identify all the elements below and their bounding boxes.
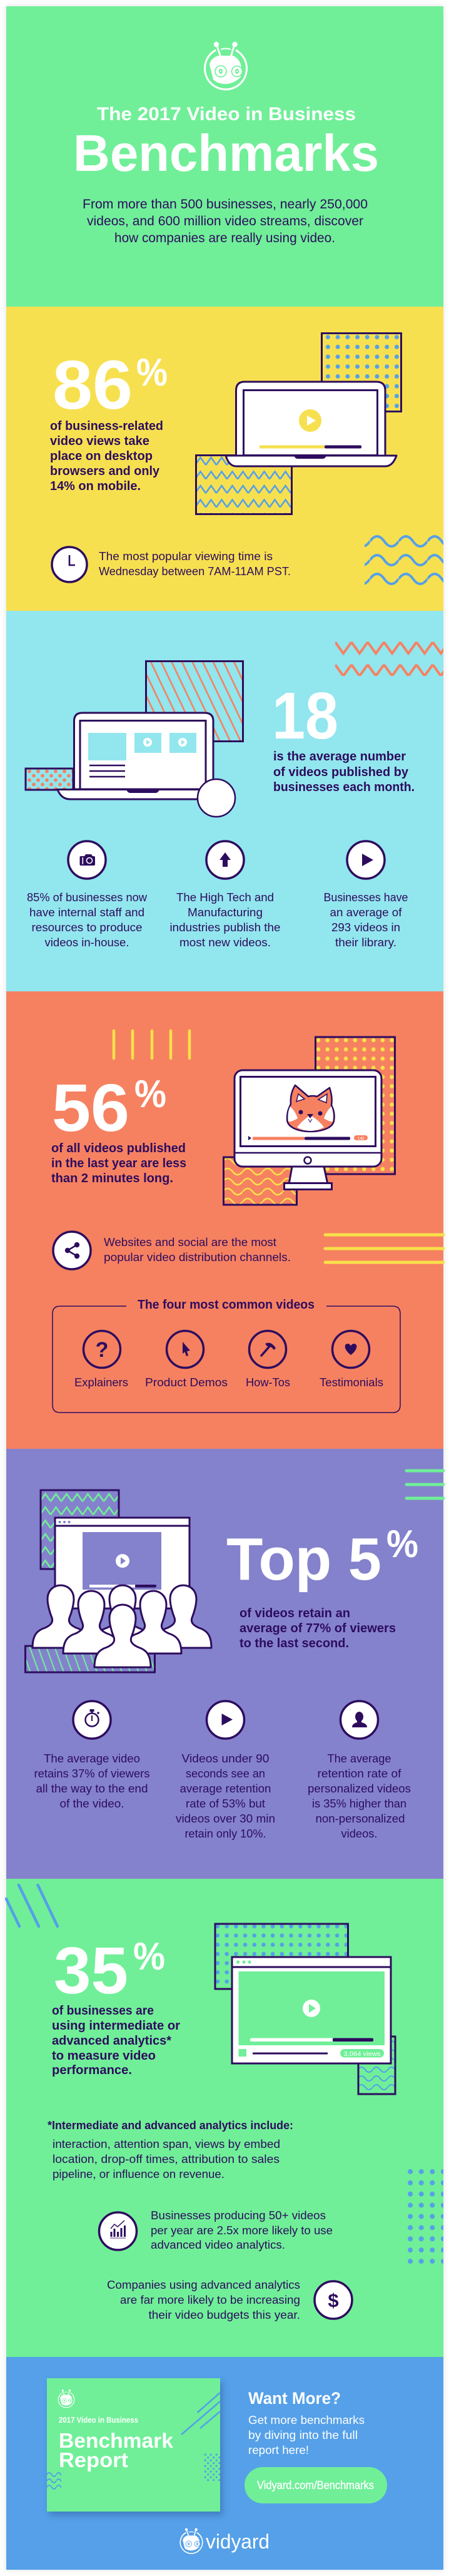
column: high tech (170, 841, 280, 949)
cta text: Get more benchmarks (248, 2414, 365, 2426)
column: high tech: The High Tech and (176, 891, 274, 904)
text: 50+ videos (151, 2209, 333, 2251)
report cover: Report (59, 2448, 128, 2471)
decoration: green lines (406, 1471, 443, 1498)
item: explainers: ? (96, 1338, 108, 1362)
distribution text: popular video distribution channels. (104, 1251, 291, 1264)
stat: 35 percent: 35 (54, 1934, 128, 2008)
column: high tech: most new videos. (179, 936, 271, 949)
stat: 35 percent (54, 1934, 165, 2008)
report cover (47, 2378, 220, 2512)
decoration: yellow lines (325, 1235, 443, 1262)
column: in-house: videos in-house. (45, 936, 129, 949)
button: Vidyard.com/Benchmarks (257, 2479, 374, 2492)
stat description: advanced analytics* (52, 2034, 171, 2048)
column: library size: 293 videos in (331, 921, 400, 934)
column: high tech: industries publish the (170, 921, 280, 934)
column: personalized videos: personalized videos (308, 1782, 411, 1795)
distribution text (104, 1236, 291, 1264)
intro text: From more than 500 businesses, nearly 250,000 (83, 197, 368, 212)
stat description (240, 1607, 396, 1650)
cta text: by diving into the full (248, 2429, 358, 2441)
stat description: than 2 minutes long. (51, 1172, 173, 1185)
column: video length retention: seconds see an (186, 1767, 265, 1780)
panel: videos published (6, 611, 443, 991)
stat description (50, 419, 163, 493)
icon: dollar: $ (328, 2289, 339, 2311)
item: how-tos (246, 1331, 290, 1389)
report cover: 2017 Video in Business (59, 2415, 138, 2425)
stat: 18: 18 (272, 679, 338, 753)
stat description: using intermediate or (52, 2019, 180, 2033)
decoration: yellow bars (114, 1031, 189, 1058)
intro text: videos, and 600 million video streams, discover (87, 214, 363, 228)
icon: clock (52, 547, 87, 582)
column: video length retention: average retention (180, 1782, 271, 1795)
stat description: of businesses are (52, 2004, 154, 2018)
stat description: is the average number (273, 750, 406, 764)
stat description (273, 750, 415, 794)
column: library size: their library. (335, 936, 396, 949)
text: video budgets (107, 2279, 300, 2321)
viewing time text: Wednesday between 7AM-11AM PST. (99, 565, 291, 578)
column: video length retention (176, 1701, 275, 1840)
panel: intro (6, 6, 443, 307)
stat: 86 percent: 86 (53, 347, 133, 424)
viewing time text: The most popular viewing time is (99, 550, 273, 563)
column: video length retention: retain only 10%. (185, 1827, 266, 1840)
intro text: how companies are really using video. (114, 231, 335, 245)
title: Benchmarks (73, 124, 379, 182)
stat description: performance. (52, 2063, 132, 2077)
panel: viewer retention (6, 1449, 443, 1879)
icon: bar chart (99, 2212, 136, 2250)
vidyard logo: vidyard (206, 2530, 270, 2553)
decoration: coral zigzags (335, 640, 443, 676)
analytics definition (48, 2119, 293, 2180)
button (245, 2467, 387, 2503)
analytics definition: pipeline, or influence on revenue. (53, 2168, 224, 2180)
stat: 86 percent: % (136, 351, 168, 394)
illustration: laptop with video (196, 333, 401, 514)
decoration: blue waves (365, 535, 443, 585)
column: library size: an average of (330, 906, 403, 919)
stat description: to the last second. (240, 1637, 349, 1650)
item: explainers (74, 1331, 128, 1389)
item: how-tos: How-Tos (246, 1376, 290, 1389)
analytics definition: *Intermediate and advanced analytics include: (48, 2119, 293, 2132)
column: personalized videos: The average (328, 1752, 391, 1765)
decoration: blue diagonal lines (6, 1885, 58, 1926)
panel: desktop views (6, 307, 443, 611)
stat: 35 percent: % (133, 1935, 165, 1978)
illustration: audience watching video (25, 1490, 211, 1672)
illustration: browser video player: 3,064 views (344, 2051, 380, 2058)
stat description: businesses each month. (273, 780, 415, 794)
stat: 86 percent (53, 347, 168, 424)
icon: fox face (287, 1085, 335, 1132)
stat description: of videos published by (273, 765, 409, 779)
column: personalized videos: videos. (341, 1827, 378, 1840)
vidyard logo (180, 2528, 270, 2553)
column: in-house: resources to produce (31, 921, 143, 934)
distribution text: Websites and social are the most (104, 1236, 276, 1249)
report cover: Benchmark (59, 2429, 174, 2452)
text: video budgets: their video budgets this year. (149, 2309, 300, 2321)
column: personalized videos: retention rate of (318, 1767, 402, 1780)
subtitle: The 2017 Video in Business (97, 104, 356, 125)
stat description: browsers and only (50, 464, 160, 478)
panel: analytics (6, 1879, 443, 2357)
stat: 56 percent: % (134, 1073, 166, 1116)
text: video budgets: are far more likely to be increasing (120, 2294, 300, 2306)
analytics definition: interaction, attention span, views by embed (53, 2138, 280, 2150)
intro text (83, 197, 368, 245)
icon: small logo (58, 2389, 74, 2408)
stat description (51, 1142, 186, 1185)
item: testimonials: Testimonials (320, 1376, 383, 1389)
stat: 56 percent (52, 1070, 166, 1145)
column: video length retention: videos over 30 min (176, 1812, 275, 1825)
stat: top 5 percent: Top 5 (226, 1526, 381, 1593)
stat description: to measure video (52, 2049, 156, 2063)
stat description: place on desktop (50, 449, 153, 463)
icon: dollar (315, 2281, 352, 2319)
panel: video length and distribution (6, 991, 443, 1449)
panel: want more (6, 2357, 443, 2570)
stat description: in the last year are less (51, 1157, 186, 1170)
item: product demos: Product Demos (145, 1376, 228, 1389)
illustration: monitor with fox video (224, 1037, 395, 1205)
illustration: browser video player (215, 1924, 395, 2094)
stat description (52, 2004, 180, 2077)
text: 50+ videos: per year are 2.5x more likely to use (151, 2224, 333, 2237)
stat description: of all videos published (51, 1142, 186, 1155)
text: video budgets: Companies using advanced analytics (107, 2279, 300, 2291)
column: personalized videos (308, 1701, 411, 1840)
stat description: video views take (50, 434, 149, 448)
item: testimonials (320, 1331, 383, 1389)
column: average retention: of the video. (60, 1797, 124, 1810)
column: personalized videos: is 35% higher than (312, 1797, 406, 1810)
icon: share (53, 1232, 91, 1269)
analytics definition: location, drop-off times, attribution to sales (53, 2153, 280, 2165)
item: product demos (145, 1331, 228, 1389)
illustration: laptop with video library (26, 661, 243, 817)
text: 50+ videos: advanced video analytics. (151, 2239, 285, 2251)
column: average retention: all the way to the end (36, 1782, 148, 1795)
column: library size: Businesses have (324, 891, 408, 904)
box heading: The four most common videos (138, 1298, 315, 1312)
cta text (248, 2414, 365, 2456)
column: average retention: The average video (44, 1752, 140, 1765)
column: library size (324, 841, 408, 949)
column: average retention (34, 1701, 150, 1810)
stat description: average of 77% of viewers (240, 1622, 396, 1635)
icon: vidyard robot logo (205, 42, 246, 89)
item: explainers: Explainers (74, 1376, 128, 1389)
column: video length retention: rate of 53% but (186, 1797, 265, 1810)
column: average retention: retains 37% of viewers (34, 1767, 150, 1780)
column: personalized videos: non-personalized (315, 1812, 405, 1825)
panel: four most common videos (53, 1298, 400, 1413)
column: in-house: have internal staff and (29, 906, 144, 919)
column: in-house: 85% of businesses now (27, 891, 148, 904)
stat description: 14% on mobile. (50, 479, 141, 493)
stat: top 5 percent: % (386, 1523, 418, 1566)
stat description: of videos retain an (240, 1607, 350, 1620)
heading: want more: Want More? (248, 2389, 341, 2408)
text: 50+ videos: Businesses producing 50+ videos (151, 2209, 326, 2222)
stat description: of business-related (50, 419, 163, 433)
cta text: report here! (248, 2444, 309, 2456)
column: high tech: Manufacturing (188, 906, 263, 919)
column: in-house (27, 841, 148, 949)
viewing time text (99, 550, 291, 578)
stat: 56 percent: 56 (52, 1070, 129, 1145)
column: video length retention: Videos under 90 (181, 1752, 269, 1765)
decoration: blue dots (405, 2166, 443, 2267)
illustration: monitor with fox video: 1:42 (358, 1137, 365, 1141)
